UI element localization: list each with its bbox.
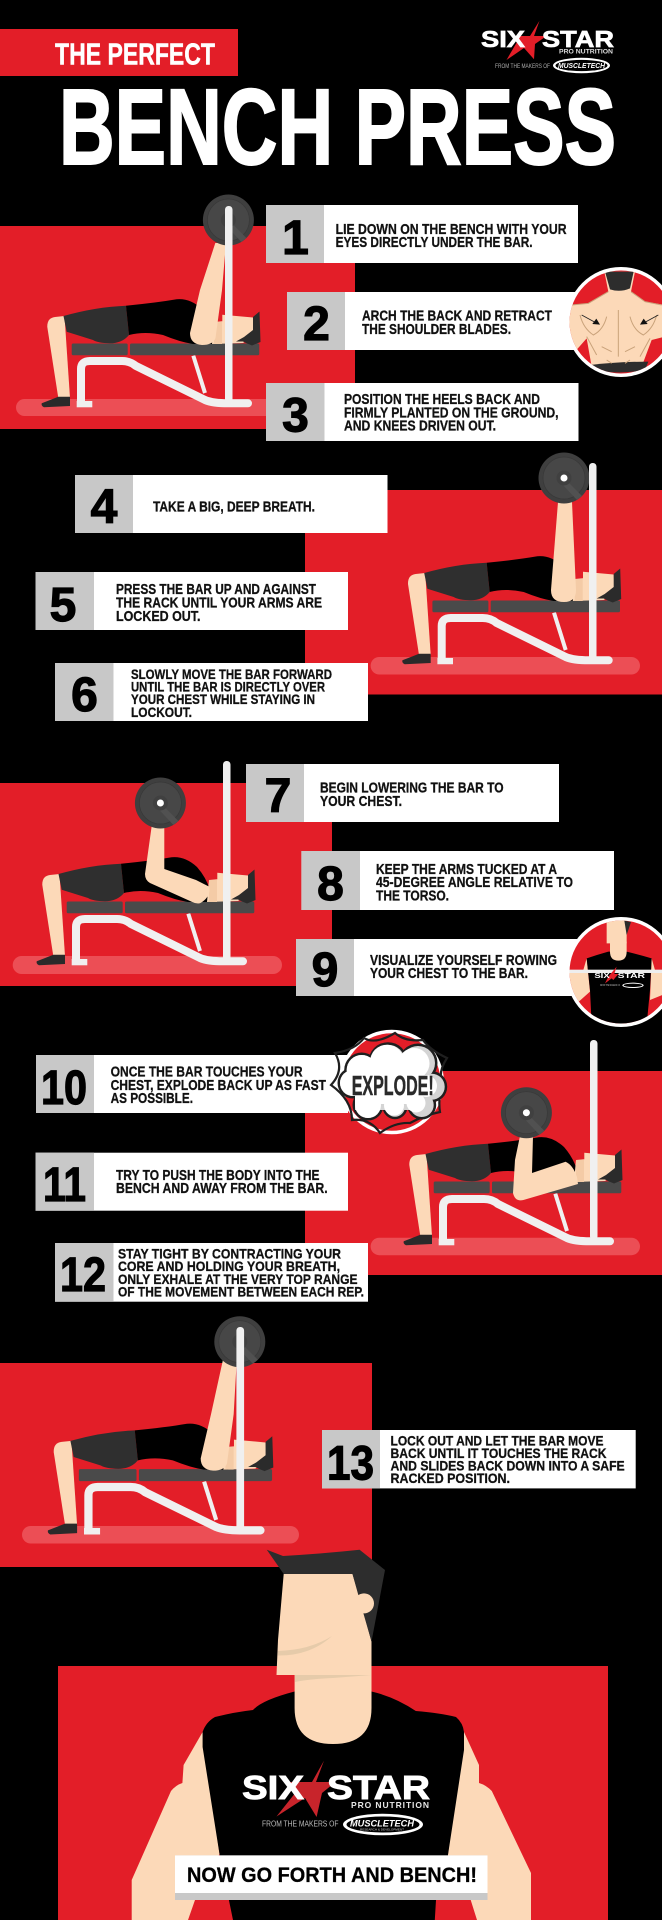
step 4: 4 bbox=[91, 481, 118, 534]
step 6: YOUR CHEST WHILE STAYING IN bbox=[131, 691, 315, 707]
panel: red background 3 bbox=[0, 783, 332, 986]
logo: six star on the shirt: RESEARCH & DEVELOPMENT bbox=[360, 1828, 404, 1832]
step 3: AND KNEES DRIVEN OUT. bbox=[344, 418, 496, 434]
step 8 bbox=[301, 851, 614, 911]
figure 1: lying under the bar bbox=[16, 194, 286, 416]
panel: red background 6 bbox=[58, 1666, 608, 1920]
step 4: TAKE A BIG, DEEP BREATH. bbox=[153, 498, 315, 515]
step 1: EYES DIRECTLY UNDER THE BAR. bbox=[336, 234, 533, 251]
figure 5: locking out and racking the bar bbox=[22, 1316, 299, 1544]
title banner: the perfect bbox=[0, 29, 238, 76]
step 5: THE RACK UNTIL YOUR ARMS ARE bbox=[116, 595, 322, 612]
step 8: THE TORSO. bbox=[376, 888, 449, 905]
step 13: BACK UNTIL IT TOUCHES THE RACK bbox=[390, 1445, 606, 1461]
step 7: BEGIN LOWERING THE BAR TO bbox=[320, 779, 504, 796]
step 3 bbox=[266, 383, 578, 442]
step 9: VISUALIZE YOURSELF ROWING bbox=[370, 952, 557, 969]
logo: six star header: FROM THE MAKERS OF bbox=[495, 63, 550, 70]
panel: red background 4 bbox=[305, 1071, 662, 1275]
icon: man rowing chest to the bar circle: FROM THE MAKERS OF bbox=[600, 984, 620, 987]
step 3: FIRMLY PLANTED ON THE GROUND, bbox=[344, 404, 558, 422]
logo: six star on the shirt: STAR bbox=[327, 1770, 430, 1807]
figure 4: exploding the bar back up bbox=[371, 1040, 640, 1255]
step 11 bbox=[36, 1153, 348, 1212]
step 6 bbox=[55, 663, 368, 722]
step 3: 3 bbox=[282, 390, 309, 442]
step 12: ONLY EXHALE AT THE VERY TOP RANGE bbox=[118, 1271, 358, 1287]
step 13: AND SLIDES BACK DOWN INTO A SAFE bbox=[390, 1458, 625, 1474]
step 7: 7 bbox=[265, 770, 291, 823]
step 7 bbox=[246, 764, 559, 823]
logo: six star on the shirt: FROM THE MAKERS OF bbox=[262, 1820, 339, 1828]
logo: six star header: PRO NUTRITION bbox=[559, 50, 613, 56]
step 6: SLOWLY MOVE THE BAR FORWARD bbox=[131, 666, 332, 682]
step 2: ARCH THE BACK AND RETRACT bbox=[362, 308, 552, 325]
step 4 bbox=[75, 475, 388, 534]
step 10: ONCE THE BAR TOUCHES YOUR bbox=[111, 1064, 303, 1081]
logo: six star header: MUSCLETECH bbox=[558, 63, 606, 70]
step 12 bbox=[55, 1243, 368, 1302]
step 2: 2 bbox=[303, 298, 330, 351]
step 8: 45-DEGREE ANGLE RELATIVE TO bbox=[376, 874, 573, 891]
step 6: 6 bbox=[71, 669, 98, 722]
logo: six star on the shirt: MUSCLETECH bbox=[350, 1818, 415, 1830]
step 1: LIE DOWN ON THE BENCH WITH YOUR bbox=[336, 221, 567, 238]
step 2: THE SHOULDER BLADES. bbox=[362, 321, 511, 338]
step 12: CORE AND HOLDING YOUR BREATH, bbox=[118, 1258, 340, 1274]
title banner: the perfect: THE PERFECT bbox=[55, 36, 215, 71]
panel: red background 1 bbox=[0, 226, 355, 429]
step 1: 1 bbox=[282, 212, 309, 265]
logo: six star on the shirt: PRO NUTRITION bbox=[351, 1800, 429, 1810]
icon: man rowing chest to the bar circle: SIX bbox=[594, 971, 610, 980]
step 8: KEEP THE ARMS TUCKED AT A bbox=[376, 861, 557, 878]
logo: six star header bbox=[481, 21, 614, 73]
logo: six star header: STAR bbox=[542, 26, 614, 52]
step 5: LOCKED OUT. bbox=[116, 608, 200, 625]
step 1 bbox=[266, 205, 578, 265]
figure: big man in six star shirt bbox=[132, 1550, 531, 1920]
icon: man rowing chest to the bar circle bbox=[570, 917, 662, 1027]
logo: six star on the shirt: SIX bbox=[242, 1770, 305, 1807]
step 9: 9 bbox=[312, 944, 338, 997]
step 13: RACKED POSITION. bbox=[390, 1470, 510, 1486]
step 12: STAY TIGHT BY CONTRACTING YOUR bbox=[118, 1246, 341, 1262]
step 13: 13 bbox=[327, 1438, 374, 1490]
step 13 bbox=[322, 1430, 636, 1490]
icon: explode burst bbox=[331, 1032, 447, 1133]
closing banner: NOW GO FORTH AND BENCH! bbox=[187, 1863, 477, 1887]
figure 3: lowering the bar to the chest bbox=[13, 761, 282, 974]
step 13: LOCK OUT AND LET THE BAR MOVE bbox=[390, 1432, 604, 1448]
step 9 bbox=[296, 939, 609, 997]
panel: red background 2 bbox=[305, 490, 662, 694]
step 5 bbox=[36, 572, 348, 632]
step 3: POSITION THE HEELS BACK AND bbox=[344, 391, 540, 408]
figure 2: arms locked out against the rack bbox=[371, 452, 640, 674]
step 7: YOUR CHEST. bbox=[320, 793, 402, 810]
step 10: AS POSSIBLE. bbox=[111, 1090, 193, 1107]
step 10 bbox=[36, 1055, 348, 1115]
logo: six star header: SIX bbox=[481, 26, 526, 52]
step 12: 12 bbox=[60, 1249, 106, 1302]
step 5: 5 bbox=[50, 579, 76, 632]
step 5: PRESS THE BAR UP AND AGAINST bbox=[116, 581, 316, 598]
icon: retracted shoulder blades circle bbox=[570, 267, 662, 377]
step 11: TRY TO PUSH THE BODY INTO THE bbox=[116, 1167, 320, 1184]
step 6: UNTIL THE BAR IS DIRECTLY OVER bbox=[131, 679, 325, 695]
step 11: 11 bbox=[43, 1159, 86, 1212]
step 2 bbox=[287, 292, 599, 351]
step 8: 8 bbox=[317, 858, 344, 911]
step 12: OF THE MOVEMENT BETWEEN EACH REP. bbox=[118, 1284, 364, 1300]
step 10: 10 bbox=[41, 1062, 87, 1115]
step 11: BENCH AND AWAY FROM THE BAR. bbox=[116, 1180, 328, 1197]
step 10: CHEST, EXPLODE BACK UP AS FAST bbox=[111, 1077, 326, 1094]
icon: explode burst: EXPLODE! bbox=[352, 1070, 434, 1101]
closing banner bbox=[175, 1855, 488, 1900]
logo: six star on the shirt bbox=[242, 1761, 430, 1835]
step 9: YOUR CHEST TO THE BAR. bbox=[370, 965, 528, 982]
step 6: LOCKOUT. bbox=[131, 704, 192, 720]
icon: man rowing chest to the bar circle: STAR bbox=[618, 971, 646, 980]
panel: red background 5 bbox=[0, 1363, 372, 1567]
